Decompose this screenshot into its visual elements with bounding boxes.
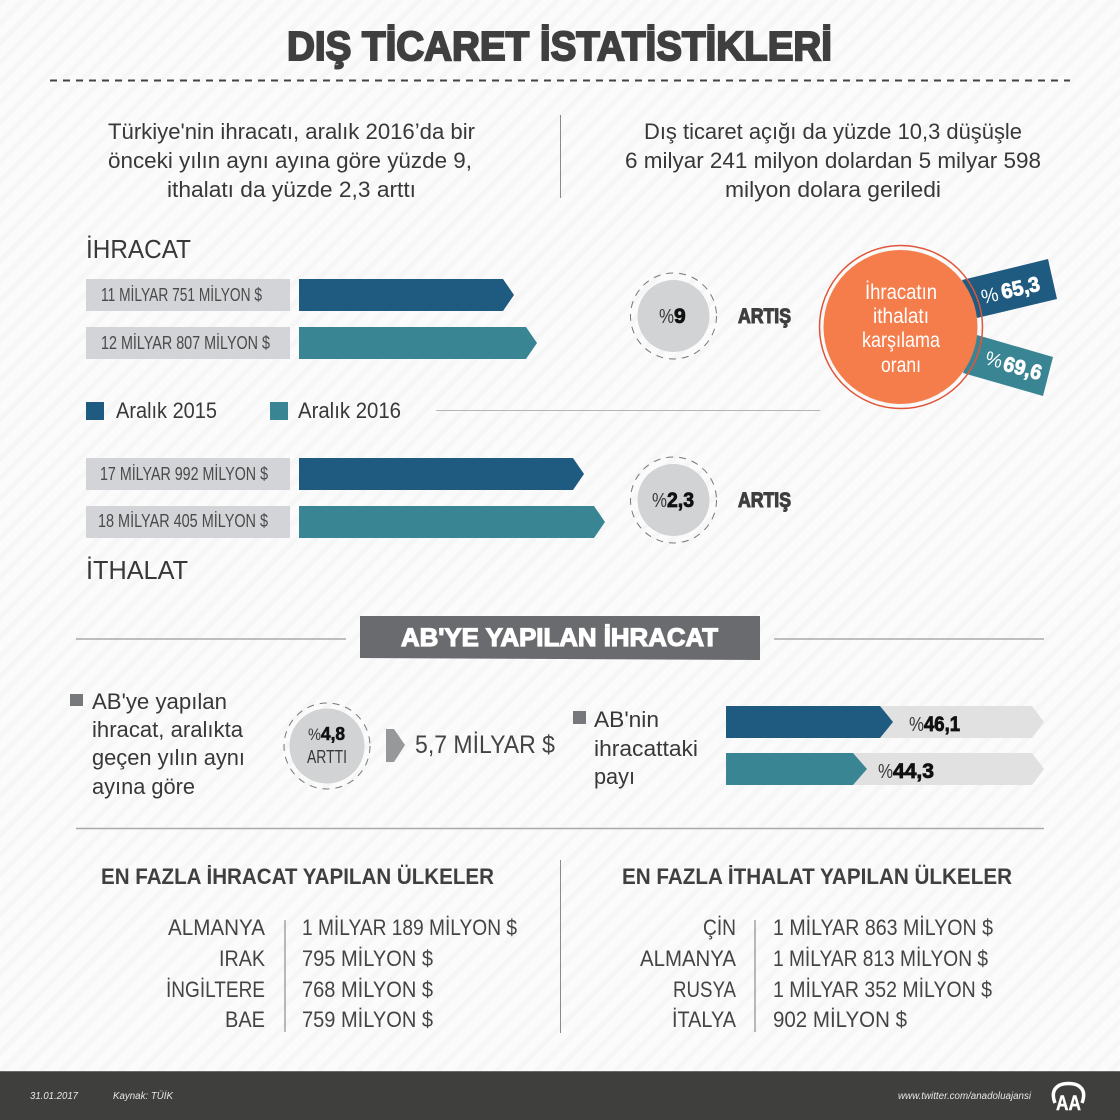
text block: export and import summary	[108, 119, 475, 202]
bar: exports December 2016: 12 MİLYAR 807 MİLYON $	[101, 333, 270, 353]
bar: 46.1 percent: %	[909, 714, 924, 736]
text block: exports to the EU: ayına göre	[92, 774, 195, 799]
text block: exports to the EU	[70, 689, 245, 799]
callout: EU exports up 4.8 percent	[284, 703, 370, 789]
panel: top import countries: ALMANYA	[640, 946, 736, 971]
bar: 44.3 percent: %	[878, 761, 893, 783]
panel: top export countries	[101, 864, 517, 1032]
footer	[0, 1071, 1120, 1120]
text block: trade deficit summary	[625, 119, 1041, 202]
callout: EU exports up 4.8 percent: ARTTI	[307, 747, 347, 767]
heading: top export countries: EN FAZLA İHRACAT YAPILAN ÜLKELER	[101, 864, 494, 889]
value: 5.7 billion dollars: 5,7 MİLYAR $	[415, 730, 555, 759]
text block: EU share in exports: payı	[594, 764, 635, 789]
ribbon: 2015 coverage ratio: 65,3	[999, 273, 1042, 304]
panel: top export countries: IRAK	[219, 946, 265, 971]
icon: Anadolu Agency logo: AA	[1056, 1092, 1081, 1115]
text block: trade deficit summary: milyon dolara geriledi	[725, 177, 941, 202]
panel: top import countries: 902 MİLYON $	[773, 1007, 907, 1032]
text block: EU share in exports	[573, 707, 698, 789]
panel: top import countries: İTALYA	[672, 1007, 736, 1032]
callout: export to import coverage ratio: İhracatın	[865, 281, 937, 304]
text block: trade deficit summary: 6 milyar 241 milyon dolardan 5 milyar 598	[625, 148, 1041, 173]
ribbon: 2016 coverage ratio	[963, 335, 1053, 396]
heading: top import countries: EN FAZLA İTHALAT YAPILAN ÜLKELER	[622, 864, 1012, 889]
callout: export to import coverage ratio	[820, 246, 982, 408]
callout: export to import coverage ratio: karşılama	[862, 329, 940, 352]
icon: Anadolu Agency logo	[1053, 1084, 1084, 1115]
footer: Kaynak: TÜİK	[113, 1090, 174, 1102]
banner: exports to the EU: AB'YE YAPILAN İHRACAT	[401, 624, 718, 652]
banner: exports to the EU	[360, 616, 760, 660]
text block: exports to the EU: AB'ye yapılan	[92, 689, 227, 714]
panel: top import countries: 1 MİLYAR 813 MİLYON $	[773, 946, 988, 971]
callout: exports increase 9 percent: ARTIŞ	[738, 305, 791, 328]
text block: EU share in exports: ihracattaki	[594, 736, 698, 761]
footer: 31.01.2017	[30, 1091, 78, 1102]
legend: Aralık 2015	[116, 398, 217, 423]
legend: Aralık 2016	[298, 398, 401, 423]
heading: exports: İHRACAT	[86, 234, 191, 264]
text block: EU share in exports: AB'nin	[594, 707, 659, 732]
bar chart: EU share	[726, 706, 1044, 785]
text block: export and import summary: ithalatı da yüzde 2,3 arttı	[167, 177, 416, 202]
title: DIŞ TİCARET İSTATİSTİKLERİ	[287, 23, 832, 69]
callout: exports increase 9 percent	[630, 273, 791, 359]
ribbon: 2016 coverage ratio: 69,6	[1001, 353, 1044, 385]
panel: top export countries: ALMANYA	[168, 915, 265, 940]
bar: imports December 2016	[86, 506, 605, 538]
bar: exports December 2015	[86, 279, 514, 311]
panel: top import countries: 1 MİLYAR 863 MİLYON $	[773, 915, 993, 940]
footer: www.twitter.com/anadoluajansi	[898, 1091, 1032, 1102]
callout: export to import coverage ratio: oranı	[881, 354, 921, 377]
bar: imports December 2015	[86, 458, 584, 490]
bar: exports December 2016	[86, 327, 537, 359]
text block: exports to the EU: ihracat, aralıkta	[92, 717, 244, 742]
callout: imports increase 2.3 percent: 2,3	[667, 489, 694, 512]
bar: 46.1 percent: 46,1	[924, 713, 960, 736]
bar: exports December 2015: 11 MİLYAR 751 MİLYON $	[101, 285, 262, 305]
bar chart: exports	[86, 279, 537, 359]
panel: top export countries: 795 MİLYON $	[302, 946, 433, 971]
ribbon: 2015 coverage ratio: %	[979, 284, 1001, 309]
ribbon: 2015 coverage ratio	[962, 259, 1057, 318]
text block: export and import summary: Türkiye'nin ihracatı, aralık 2016’da bir	[108, 119, 475, 144]
ribbon: 2016 coverage ratio: %	[983, 348, 1005, 373]
bar chart: imports	[86, 458, 605, 538]
panel: top import countries: ÇİN	[703, 915, 736, 940]
panel: top export countries: 1 MİLYAR 189 MİLYON $	[302, 915, 517, 940]
bar: imports December 2015: 17 MİLYAR 992 MİLYON $	[100, 464, 268, 484]
bar: imports December 2016: 18 MİLYAR 405 MİLYON $	[98, 511, 268, 531]
callout: exports increase 9 percent: %	[659, 306, 674, 328]
legend	[86, 398, 401, 423]
callout: export to import coverage ratio: ithalatı	[873, 305, 929, 328]
callout: exports increase 9 percent: 9	[674, 305, 686, 328]
bar: 44.3 percent	[726, 753, 1044, 785]
callout: imports increase 2.3 percent: ARTIŞ	[738, 489, 791, 512]
callout: imports increase 2.3 percent	[630, 457, 791, 543]
callout: EU exports up 4.8 percent: %	[308, 725, 321, 744]
panel: top import countries	[622, 864, 1012, 1032]
panel: top export countries: 759 MİLYON $	[302, 1007, 433, 1032]
panel: top import countries: RUSYA	[673, 977, 736, 1002]
arrow	[386, 729, 405, 762]
bar: 46.1 percent	[726, 706, 1044, 738]
panel: top export countries: İNGİLTERE	[166, 977, 265, 1002]
heading: imports: İTHALAT	[86, 555, 188, 585]
text block: trade deficit summary: Dış ticaret açığı da yüzde 10,3 düşüşle	[644, 119, 1022, 144]
callout: imports increase 2.3 percent: %	[652, 490, 667, 512]
panel: top import countries: 1 MİLYAR 352 MİLYON $	[773, 977, 992, 1002]
callout: EU exports up 4.8 percent: 4,8	[321, 724, 345, 744]
text block: export and import summary: önceki yılın aynı ayına göre yüzde 9,	[108, 148, 472, 173]
panel: top export countries: 768 MİLYON $	[302, 977, 433, 1002]
panel: top export countries: BAE	[225, 1007, 265, 1032]
text block: exports to the EU: geçen yılın aynı	[92, 745, 245, 770]
bar: 44.3 percent: 44,3	[893, 760, 934, 783]
